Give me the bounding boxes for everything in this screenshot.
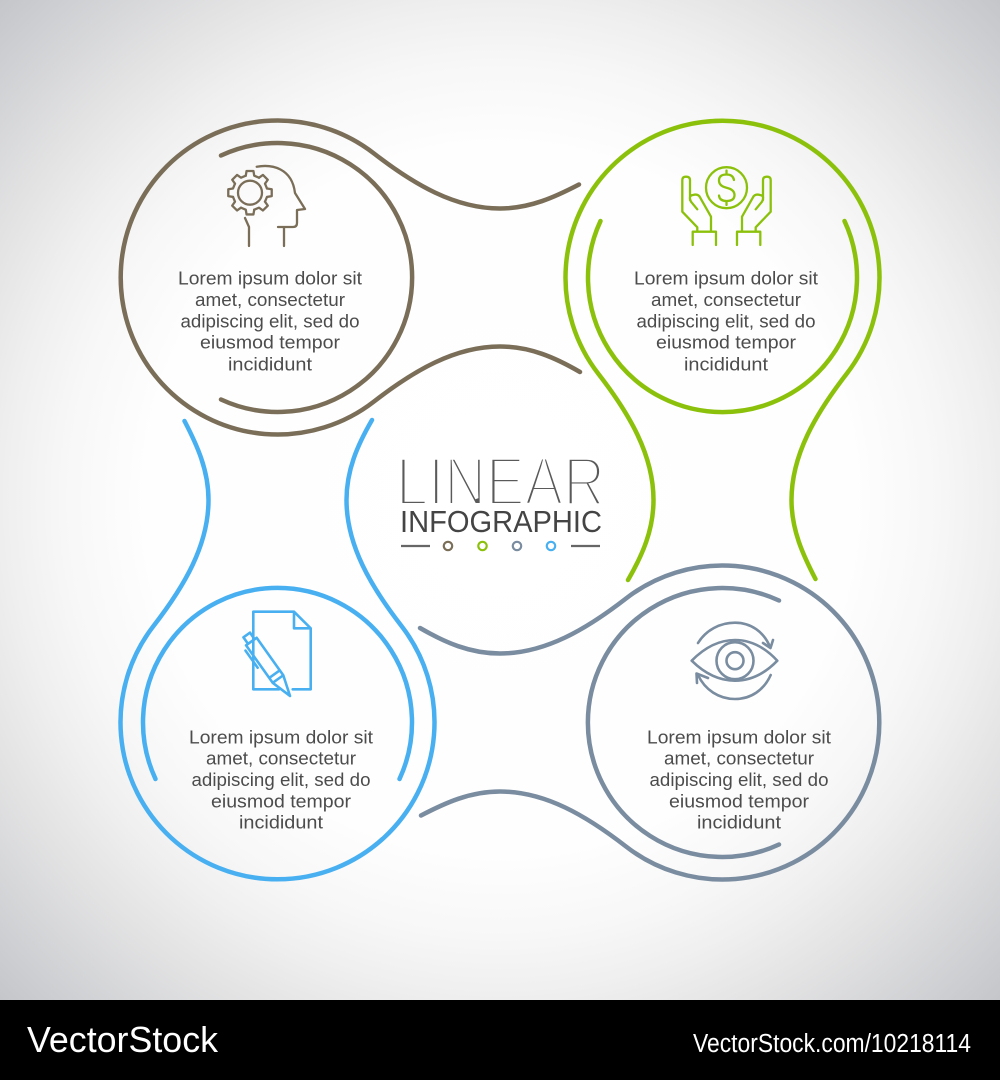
text block: top-left: eiusmod tempor <box>200 332 340 353</box>
text block: bottom-right: Lorem ipsum dolor sit <box>647 726 831 747</box>
green inner arc <box>588 221 857 412</box>
blue outer wave outline <box>120 420 434 879</box>
text block: top-right <box>634 268 818 374</box>
text block: top-left <box>178 268 362 374</box>
text block: bottom-left: Lorem ipsum dolor sit <box>189 726 373 747</box>
footer brand: VectorStock <box>27 1019 219 1060</box>
title: LINEAR: LINEAR <box>396 443 605 520</box>
text block: bottom-right <box>647 726 831 833</box>
text block: bottom-left: adipiscing elit, sed do <box>192 769 370 790</box>
green outer wave outline <box>566 121 880 580</box>
central title block <box>396 443 605 550</box>
icon: hands holding coin <box>682 167 771 245</box>
text block: bottom-left: eiusmod tempor <box>211 790 351 811</box>
text block: bottom-left: amet, consectetur <box>206 747 356 768</box>
panel: top-left brown circle <box>121 120 580 434</box>
icon: head with gear <box>228 166 305 246</box>
text block: top-left: adipiscing elit, sed do <box>180 310 360 331</box>
brown inner arc <box>221 143 412 412</box>
text block: bottom-right: incididunt <box>697 812 781 833</box>
footer bar <box>0 1000 1000 1080</box>
text block: bottom-left <box>189 726 373 833</box>
icon: document and pen <box>239 612 311 702</box>
panel: top-right green circle <box>566 121 880 580</box>
panel: bottom-left blue circle <box>120 420 434 879</box>
slate outer wave outline <box>420 566 879 880</box>
text block: top-left: Lorem ipsum dolor sit <box>178 268 362 289</box>
divider with four coloured dots <box>401 542 600 550</box>
text block: top-left: amet, consectetur <box>195 289 345 310</box>
title: INFOGRAPHIC: INFOGRAPHIC <box>400 504 602 539</box>
text block: top-right: adipiscing elit, sed do <box>636 310 816 331</box>
text block: top-right: amet, consectetur <box>651 289 801 310</box>
text block: top-right: incididunt <box>684 353 768 374</box>
brown outer wave outline <box>121 120 580 434</box>
text block: top-left: incididunt <box>228 353 312 374</box>
text block: top-right: Lorem ipsum dolor sit <box>634 268 818 289</box>
footer url: VectorStock.com/10218114 <box>693 1030 971 1058</box>
blue inner arc <box>143 588 412 779</box>
panel: bottom-right slate circle <box>420 566 879 880</box>
slate inner arc <box>588 588 779 857</box>
text block: top-right: eiusmod tempor <box>656 332 796 353</box>
icon: eye with rotating arrows <box>692 623 777 699</box>
text block: bottom-right: eiusmod tempor <box>669 790 809 811</box>
text block: bottom-left: incididunt <box>239 812 323 833</box>
text block: bottom-right: adipiscing elit, sed do <box>650 769 828 790</box>
text block: bottom-right: amet, consectetur <box>664 747 814 768</box>
